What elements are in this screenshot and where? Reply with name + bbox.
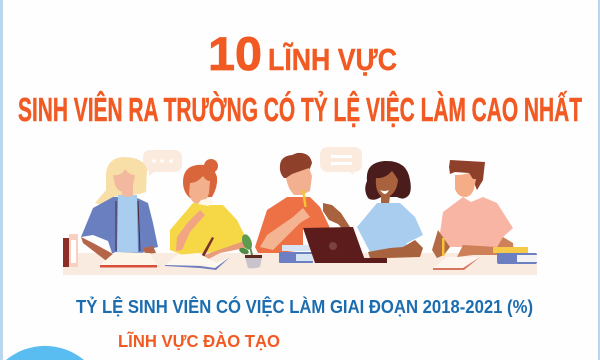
title: number and first line: 10 [208,27,262,80]
illustration: students at a table [63,147,537,275]
icon: books and bottle at left [63,234,78,267]
figure: student in yellow [165,159,250,270]
title: number and first line: LĨNH VỰC [268,42,397,77]
title: number and first line [208,27,397,80]
blue circle, top of next element [6,346,84,360]
icon: potted plant [238,233,262,268]
icon: laptop [303,227,387,263]
stack of books [493,247,528,253]
section heading: LĨNH VỰC ĐÀO TẠO [118,330,280,351]
figure: student in blue [323,161,423,258]
figure: student in orange [255,153,330,263]
notebook [165,253,230,268]
icon: speech bubble dots [143,150,182,176]
subtitle: TỶ LỆ SINH VIÊN CÓ VIỆC LÀM GIAI ĐOẠN 2018-2021 (%) [76,296,533,317]
table [63,253,537,275]
figure: student in pink [432,160,537,270]
stack of books [282,245,310,251]
open book [100,252,157,266]
figure: blonde student [81,157,158,268]
icon: speech bubble lines [320,147,362,175]
notebook [433,257,480,269]
